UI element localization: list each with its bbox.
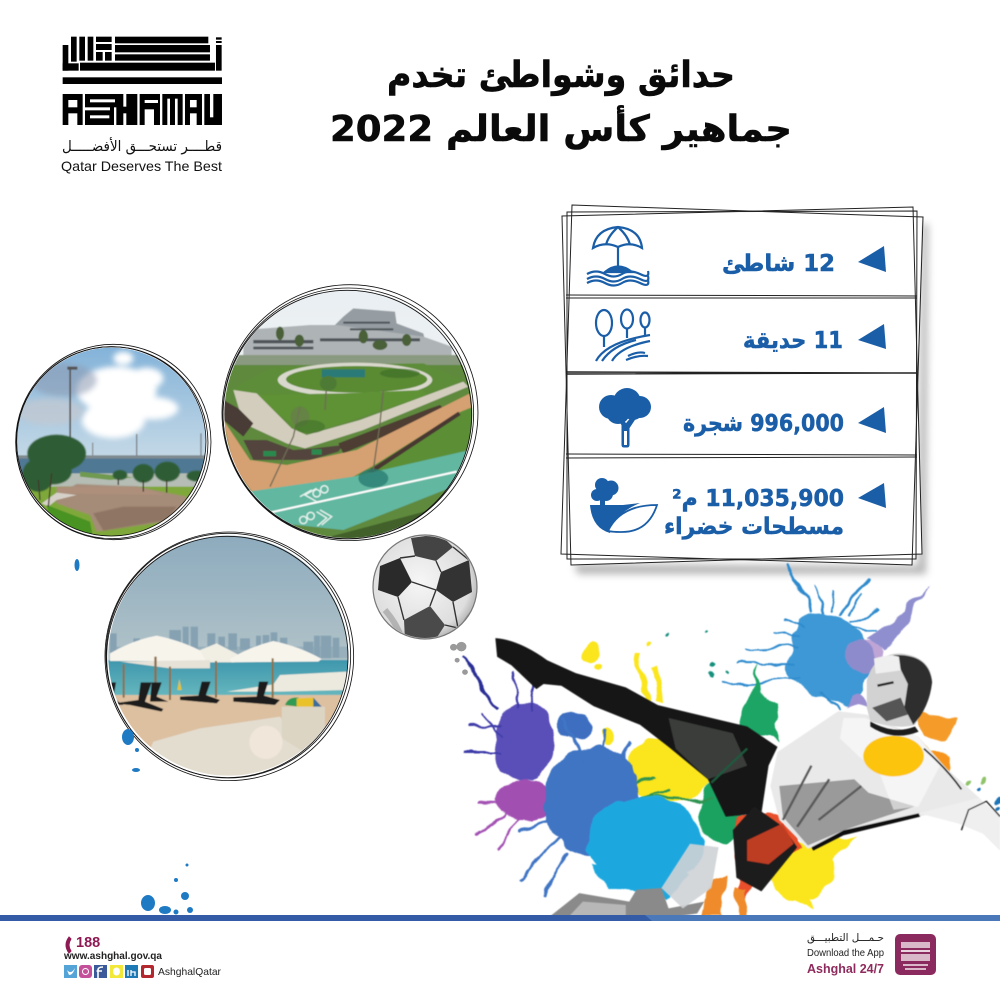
circle sketch outline bbox=[105, 532, 354, 781]
icon: trees and path bbox=[596, 310, 650, 361]
app name: Ashghal 24/7 bbox=[807, 961, 884, 976]
paint splashes and player illustration bbox=[450, 567, 1000, 919]
social handle: AshghalQatar bbox=[158, 966, 221, 978]
phone number: 188 bbox=[76, 935, 100, 951]
text: area: 11,035,900 م² bbox=[672, 486, 844, 512]
app English label: Download the App bbox=[807, 947, 884, 959]
row: green areas bbox=[590, 478, 886, 540]
arrow 1 bbox=[858, 246, 886, 272]
title bbox=[330, 55, 792, 150]
grey dots by ball bbox=[450, 642, 468, 675]
panel sketch frames bbox=[561, 205, 923, 565]
player: head bbox=[867, 653, 932, 736]
splash: blue and cyan bbox=[520, 711, 704, 898]
player: black shorts and leg bbox=[495, 638, 797, 891]
icon: tree and leaf bbox=[590, 478, 657, 533]
text: green areas: مسطحات خضراء bbox=[664, 514, 844, 540]
footer app block bbox=[807, 932, 936, 976]
footer background bbox=[0, 919, 1000, 1000]
app Arabic label: حـمـــل التطبيـــق bbox=[807, 932, 884, 944]
panel shadow bbox=[574, 224, 928, 574]
website: www.ashghal.gov.qa bbox=[63, 951, 162, 962]
logo English tagline: Qatar Deserves The Best bbox=[61, 159, 222, 174]
panel body bbox=[561, 205, 922, 565]
logo mark bbox=[63, 37, 222, 125]
row: beaches bbox=[587, 227, 886, 286]
text: 11 parks: 11 حديقة bbox=[743, 328, 843, 354]
player: torso bbox=[770, 711, 1000, 851]
title line 2: جماهير كأس العالم 2022 bbox=[330, 105, 792, 150]
icon: beach umbrella bbox=[587, 227, 648, 286]
splash: chest yellow and orange bbox=[860, 715, 1000, 811]
footer bar bbox=[0, 915, 1000, 921]
splash: top blue bbox=[724, 567, 929, 708]
icon: phone bbox=[66, 937, 71, 953]
circle sketch outline bbox=[16, 344, 211, 540]
logo Arabic tagline: قطــــر تستحـــق الأفضـــــل bbox=[62, 137, 222, 155]
circle sketch outline bbox=[222, 285, 478, 541]
row: parks bbox=[596, 310, 886, 361]
app icon bbox=[895, 934, 936, 975]
text: 996,000 trees: 996,000 شجرة bbox=[683, 411, 844, 437]
row: trees bbox=[599, 388, 886, 447]
photo: beach bbox=[100, 525, 360, 785]
arrow 2 bbox=[858, 324, 886, 349]
footer contact block bbox=[63, 935, 221, 978]
splash: green bbox=[601, 629, 779, 844]
social icons bbox=[64, 965, 154, 978]
arrow 3 bbox=[858, 407, 886, 433]
splash: yellow bbox=[580, 639, 858, 908]
splash: purple bbox=[461, 657, 556, 852]
splash: orange and red bbox=[701, 810, 801, 917]
text: 12 beaches: 12 شاطئ bbox=[722, 251, 835, 277]
stray paint drops bbox=[74, 559, 193, 914]
row dividers bbox=[566, 295, 917, 458]
photo: park and reeds bbox=[15, 344, 212, 540]
panel: stats bbox=[561, 205, 928, 574]
arrow 4 bbox=[858, 483, 886, 508]
Ashghal logo bbox=[61, 37, 222, 174]
player: lower boot and leg bbox=[547, 844, 719, 919]
soccer ball bbox=[373, 534, 480, 645]
title line 1: حدائق وشواطئ تخدم bbox=[387, 55, 735, 96]
icon: tree bbox=[599, 388, 651, 447]
photo: park with cycle track bbox=[222, 284, 478, 541]
